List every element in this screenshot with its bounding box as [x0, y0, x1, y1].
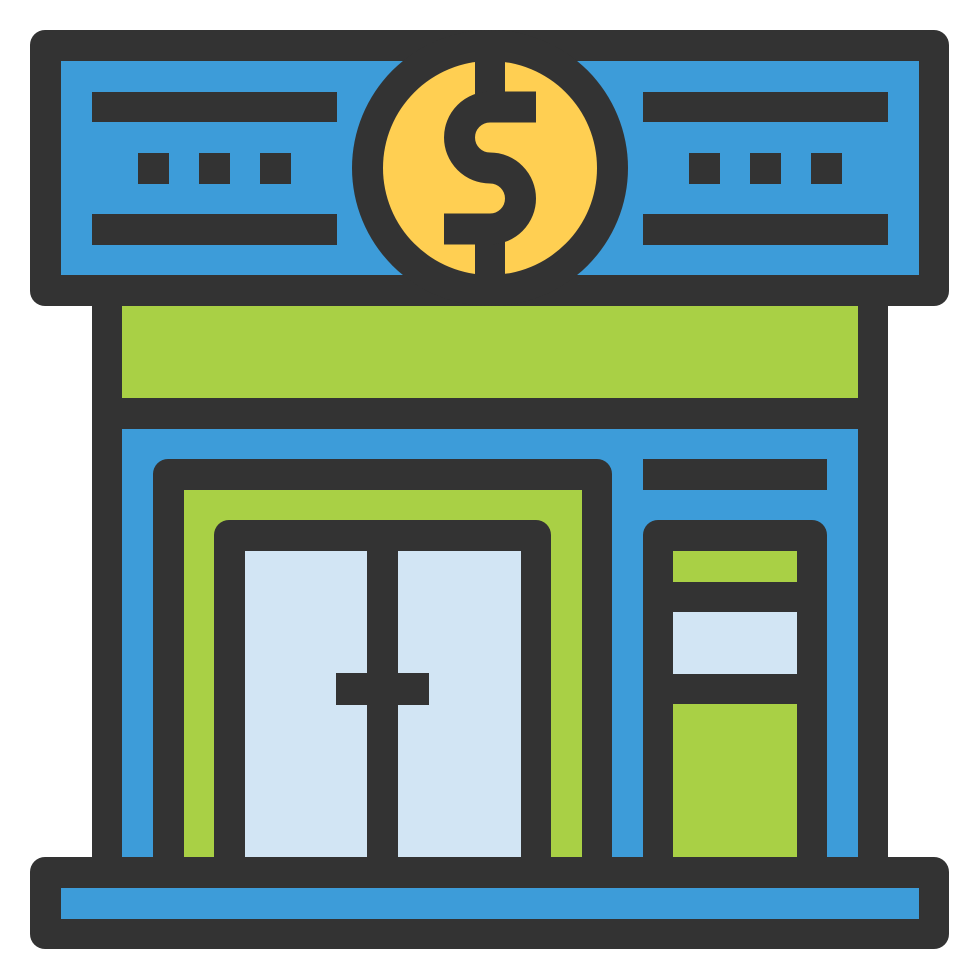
building body [92, 290, 888, 880]
icon: dollar coin [352, 30, 628, 306]
base step [30, 857, 949, 949]
main door frame [153, 459, 612, 870]
top sign board [30, 30, 949, 306]
sign bar above window [643, 459, 827, 490]
side window [643, 520, 827, 870]
